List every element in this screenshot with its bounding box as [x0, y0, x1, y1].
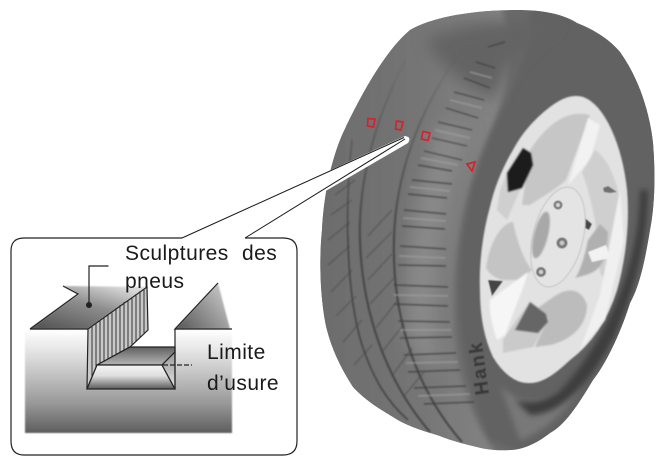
rim windows — [497, 148, 533, 220]
tread leader line — [86, 266, 108, 308]
label: wear limit — [207, 341, 279, 395]
wear bar front face — [87, 365, 175, 389]
right top surface — [175, 283, 230, 329]
callout pointer — [182, 136, 409, 238]
light rib highlights — [394, 72, 492, 396]
marker square 2 — [396, 121, 403, 130]
red tread wear markers — [368, 118, 475, 171]
callout border — [11, 238, 297, 455]
label: wear limit: d’usure — [207, 372, 279, 395]
dark band around lower rim — [515, 190, 648, 415]
label: tread: des — [242, 242, 277, 265]
label: tread: Sculptures — [125, 242, 229, 265]
callout panel — [11, 136, 409, 455]
wheel hub — [521, 181, 595, 293]
tread diagram — [25, 266, 232, 433]
valve stem — [603, 186, 617, 193]
wear bar side — [162, 352, 175, 389]
marker triangle — [467, 162, 475, 171]
label: tread: pneus — [125, 270, 184, 293]
left top surface — [30, 286, 147, 329]
wear limit dashed leader — [163, 364, 192, 366]
label: wear limit: Limite — [207, 341, 266, 364]
hatched groove wall — [87, 287, 148, 389]
circumferential grooves — [348, 60, 462, 442]
marker square 3 — [422, 132, 430, 140]
tread rib lines — [394, 42, 505, 404]
groove right wall — [174, 329, 176, 389]
label: tread — [125, 242, 277, 293]
tire body — [320, 10, 654, 450]
tread and sidewall shading — [315, 5, 657, 457]
sidewall brand lettering: Hank — [466, 339, 494, 396]
alloy wheel rim — [480, 96, 628, 383]
groove floor — [97, 347, 175, 365]
rim grey panels — [486, 114, 624, 350]
marker square 1 — [368, 118, 375, 127]
shoulder tread blocks — [328, 180, 424, 396]
rubber block — [25, 330, 232, 433]
tire photo — [315, 5, 657, 457]
